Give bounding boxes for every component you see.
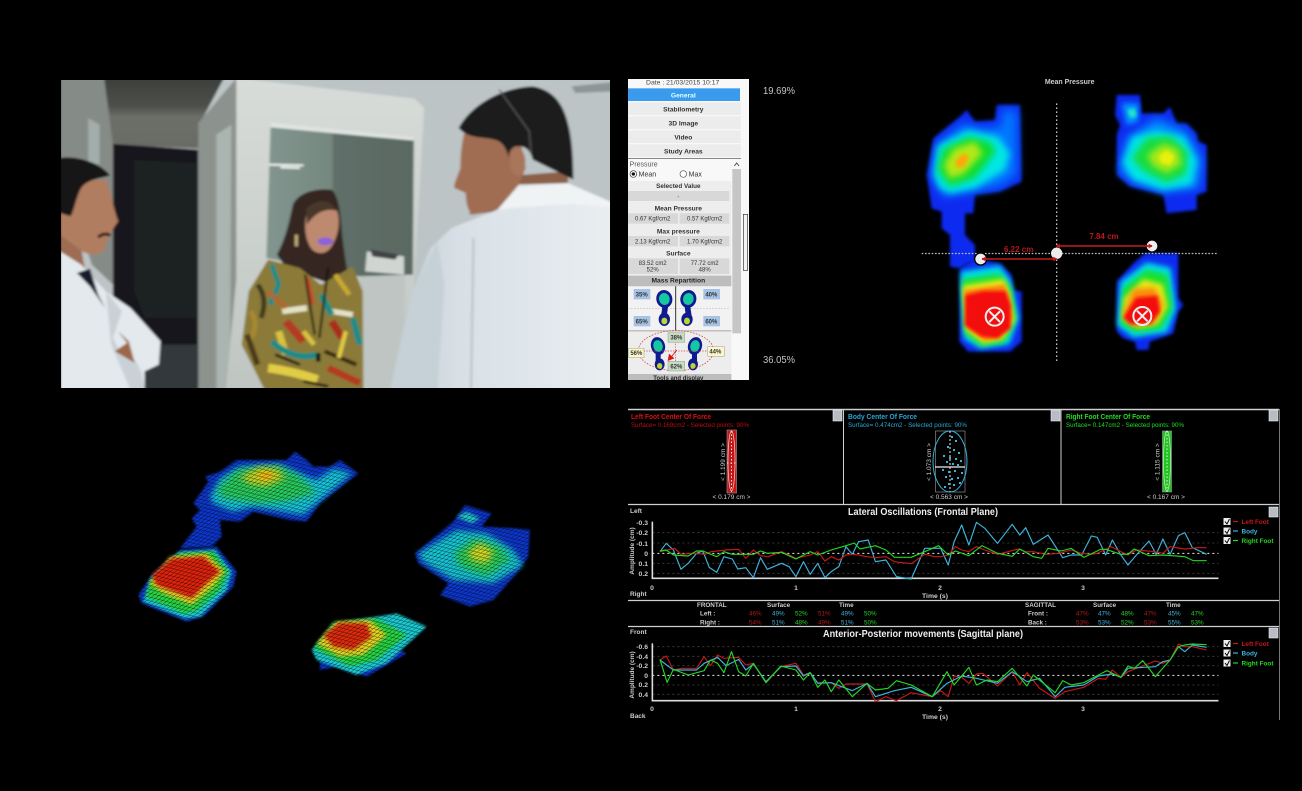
frontal and sagittal statistics table: 49% xyxy=(772,610,785,618)
left foot heel heat blob xyxy=(959,258,1022,352)
mean pressure values: 0.67 Kgf/cm2 xyxy=(635,217,671,223)
x axis labels: 2 xyxy=(938,706,942,713)
frontal and sagittal statistics table: Surface xyxy=(767,602,791,609)
3D right forefoot xyxy=(415,505,530,607)
chart legend: Body xyxy=(1242,650,1258,658)
body center of force: Surface= 0.474cm2 - Selected points: 90% xyxy=(848,422,967,429)
axis direction labels: Right xyxy=(630,591,647,598)
frontal and sagittal statistics table: 49% xyxy=(818,620,831,626)
lateral oscillations chart xyxy=(629,506,1278,600)
mass percentages upper: 65% xyxy=(636,319,648,325)
x axis labels: 1 xyxy=(794,585,798,592)
x axis labels: 0 xyxy=(650,706,654,713)
max pressure values: 1.70 Kgf/cm2 xyxy=(687,239,723,245)
man right xyxy=(469,171,568,215)
mass percentages upper: 40% xyxy=(705,292,718,298)
axis direction labels: Front xyxy=(630,629,647,636)
left foot forefoot heat blob xyxy=(927,105,1022,268)
software side panel xyxy=(628,79,749,382)
x axis labels: 1 xyxy=(794,706,798,713)
tools and display header: Tools and display xyxy=(653,376,704,382)
pressure radio selector xyxy=(630,162,702,178)
mass percentages upper: 35% xyxy=(636,292,648,298)
body center of force xyxy=(848,410,1060,501)
frontal and sagittal statistics table: 52% xyxy=(795,610,808,618)
center of pressure marker left heel xyxy=(986,308,1004,326)
right foot center of force: < 1.115 cm > xyxy=(1154,443,1162,481)
button: 3D Image: 3D Image xyxy=(669,120,698,127)
left distance marker and label xyxy=(975,245,1057,265)
left foot center of force: < 1.199 cm > xyxy=(720,443,727,481)
selected value: Selected Value xyxy=(656,183,701,190)
left foot center of force: Surface= 0.169cm2 - Selected points: 90% xyxy=(631,422,749,429)
lateral oscillations chart: Amplitude (cm) xyxy=(629,527,636,575)
chart title: Anterior-Posterior movements (Sagittal plane) xyxy=(823,628,1023,640)
forefoot percentage: 19.69% xyxy=(763,86,795,97)
frontal and sagittal statistics table: SAGITTAL xyxy=(1025,602,1056,609)
x axis labels: 0 xyxy=(650,585,654,592)
frontal and sagittal statistics table: 47% xyxy=(1076,610,1089,618)
chart legend: Right Foot xyxy=(1242,660,1274,668)
dotted axes xyxy=(922,103,1217,362)
axis direction labels: Back xyxy=(630,713,646,720)
surface values: 83.52 cm2 xyxy=(639,261,667,267)
frontal and sagittal statistics table: Right : xyxy=(700,620,720,626)
balance ellipse with percentages xyxy=(629,331,724,371)
y axis labels xyxy=(636,644,648,699)
surface values: 48% xyxy=(699,268,711,274)
y axis labels: -0.2 xyxy=(636,663,648,670)
button: Video xyxy=(628,130,741,143)
center of pressure marker right heel xyxy=(1133,307,1151,325)
left foot center of force xyxy=(631,410,842,501)
3D left heel xyxy=(138,547,237,622)
3D pressure map xyxy=(120,440,550,700)
y axis labels: -0.4 xyxy=(636,654,648,661)
max pressure values: 2.13 Kgf/cm2 xyxy=(635,239,671,245)
y axis labels: 0.2 xyxy=(639,571,648,578)
frontal and sagittal statistics table: Front : xyxy=(1028,610,1048,618)
frontal and sagittal statistics table: 51% xyxy=(818,610,831,618)
chart title: Lateral Oscillations (Frontal Plane) xyxy=(848,506,998,518)
x axis labels: Time (s) xyxy=(922,593,948,600)
chart legend: Right Foot xyxy=(1242,538,1274,545)
frontal and sagittal statistics table: 51% xyxy=(772,620,785,626)
chart legend: Body xyxy=(1242,528,1258,536)
frontal and sagittal statistics table xyxy=(697,602,1204,626)
surface values xyxy=(628,251,729,274)
y axis labels: -0.6 xyxy=(636,644,648,651)
body line xyxy=(660,645,1207,697)
left foot line xyxy=(660,644,1207,702)
left distance marker and label: 6.22 cm xyxy=(1004,245,1033,254)
x axis labels xyxy=(650,585,1085,600)
y axis labels: 0 xyxy=(644,673,648,680)
y axis labels: 0.1 xyxy=(639,561,648,568)
chart legend xyxy=(1224,518,1274,545)
frontal and sagittal statistics table: 55% xyxy=(1168,620,1181,626)
scrollbar xyxy=(732,163,748,333)
stabilometry panel frame xyxy=(628,409,1280,720)
right foot center of force: < 0.167 cm > xyxy=(1147,494,1185,501)
right foot center of force: Surface= 0.147cm2 - Selected points: 90% xyxy=(1066,422,1184,429)
frontal and sagittal statistics table: 45% xyxy=(1168,610,1181,618)
right foot line xyxy=(660,644,1207,697)
line plot xyxy=(652,643,1218,702)
frontal and sagittal statistics table: Surface xyxy=(1093,602,1117,609)
body center of force: < 1.073 cm > xyxy=(926,443,933,481)
frontal and sagittal statistics table: 50% xyxy=(864,610,877,618)
left foot center of force: < 0.179 cm > xyxy=(713,494,751,501)
3D right heel xyxy=(312,613,427,677)
tools and display header xyxy=(628,374,731,382)
frontal and sagittal statistics table: 54% xyxy=(749,620,762,626)
mini foot icons xyxy=(649,288,704,370)
balance ellipse with percentages: 62% xyxy=(670,364,683,370)
button: General: General xyxy=(671,92,696,99)
x axis labels: Time (s) xyxy=(922,714,948,721)
rearfoot percentage: 36.05% xyxy=(763,355,795,366)
axis direction labels xyxy=(630,629,647,720)
frontal and sagittal statistics table: 52% xyxy=(1121,620,1134,626)
surface values: Surface xyxy=(666,251,691,258)
balance ellipse with percentages: 44% xyxy=(709,349,722,355)
max pressure values xyxy=(628,228,729,246)
button: Study Areas: Study Areas xyxy=(664,148,703,155)
frontal and sagittal statistics table: 47% xyxy=(1144,610,1157,618)
button: Stabilometry: Stabilometry xyxy=(663,106,704,113)
selected value: - xyxy=(677,194,679,200)
mass repartition: Mass Repartition xyxy=(652,278,705,285)
y axis labels: -0.2 xyxy=(636,530,648,537)
y axis labels: 0.4 xyxy=(639,692,648,699)
3D left forefoot xyxy=(180,452,358,548)
pressure radio selector: Pressure xyxy=(630,162,658,169)
y axis labels: 0.2 xyxy=(639,682,648,689)
axis direction labels xyxy=(630,508,647,598)
y axis labels xyxy=(636,520,648,578)
y axis labels: -0.3 xyxy=(636,520,648,527)
frontal and sagittal statistics table: 48% xyxy=(795,620,808,626)
right foot center of force: Right Foot Center Of Force xyxy=(1066,412,1150,421)
frontal and sagittal statistics table: Time xyxy=(839,602,854,609)
right foot center of force xyxy=(1066,410,1278,501)
balance ellipse with percentages: 56% xyxy=(630,351,643,357)
mass repartition xyxy=(628,276,731,371)
woman xyxy=(277,189,351,291)
mean pressure values: 0.57 Kgf/cm2 xyxy=(687,217,723,223)
x axis labels: 3 xyxy=(1081,585,1085,592)
button: 3D Image xyxy=(628,116,741,129)
right foot heel heat blob xyxy=(1117,253,1183,350)
frontal and sagittal statistics table: 51% xyxy=(841,620,854,626)
x axis labels xyxy=(650,706,1085,721)
infographic canvas xyxy=(61,79,1280,720)
photo: three clinicians talking in corridor xyxy=(60,78,614,390)
y axis labels: -0.1 xyxy=(636,541,648,548)
frontal and sagittal statistics table: FRONTAL xyxy=(697,602,727,609)
frontal and sagittal statistics table: Left : xyxy=(700,610,715,618)
surface values: 52% xyxy=(647,268,659,274)
frontal and sagittal statistics table: 47% xyxy=(1191,610,1204,618)
button: Study Areas xyxy=(628,144,741,157)
frontal and sagittal statistics table: 48% xyxy=(1121,610,1134,618)
date line: Date : 21/03/2015 10:17 xyxy=(646,80,720,87)
pressure radio selector: Max xyxy=(689,171,702,178)
x axis labels: 3 xyxy=(1081,706,1085,713)
pressure radio selector: Mean xyxy=(639,171,656,178)
frontal and sagittal statistics table: 53% xyxy=(1144,620,1157,626)
frontal and sagittal statistics table: 49% xyxy=(841,610,854,618)
mass percentages upper xyxy=(634,289,720,326)
button: General xyxy=(628,88,740,101)
center point xyxy=(1051,248,1062,259)
right foot forefoot heat blob xyxy=(1115,95,1207,213)
x axis labels: 2 xyxy=(938,585,942,592)
right distance marker and label: 7.84 cm xyxy=(1089,232,1119,241)
frontal and sagittal statistics table: 50% xyxy=(864,620,877,626)
max pressure values: Max pressure xyxy=(657,228,700,235)
anterior-posterior movements chart: Amplitude (cm) xyxy=(629,651,636,699)
axis direction labels: Left xyxy=(630,508,643,515)
chart legend xyxy=(1224,640,1274,668)
3D mesh grid xyxy=(120,440,550,700)
anterior-posterior movements chart xyxy=(629,628,1278,721)
surface values: 77.72 cm2 xyxy=(691,261,719,267)
balance ellipse with percentages: 38% xyxy=(670,336,683,342)
mean pressure heat map xyxy=(922,79,1217,362)
frontal and sagittal statistics table: 53% xyxy=(1191,620,1204,626)
frontal and sagittal statistics table: 53% xyxy=(1098,620,1111,626)
selected value xyxy=(628,183,729,201)
body center of force: < 0.563 cm > xyxy=(930,494,968,501)
frontal and sagittal statistics table: 47% xyxy=(1098,610,1111,618)
frontal and sagittal statistics table: 53% xyxy=(1076,620,1089,626)
frontal and sagittal statistics table: Time xyxy=(1166,602,1181,609)
body center of force: Body Center Of Force xyxy=(848,412,917,421)
mean pressure values: Mean Pressure xyxy=(655,206,702,213)
left foot center of force: Left Foot Center Of Force xyxy=(631,412,711,421)
line plot xyxy=(652,522,1218,579)
mean pressure values xyxy=(628,206,729,224)
man left xyxy=(60,235,85,268)
mass percentages upper: 60% xyxy=(705,319,718,325)
button: Stabilometry xyxy=(628,102,741,115)
chart legend: Left Foot xyxy=(1242,641,1270,648)
right distance marker and label xyxy=(1056,232,1157,251)
chart legend: Left Foot xyxy=(1242,519,1270,526)
right foot line xyxy=(660,543,1207,561)
body line xyxy=(660,522,1207,579)
frontal and sagittal statistics table: Back : xyxy=(1028,620,1047,626)
frontal and sagittal statistics table: 46% xyxy=(749,610,762,618)
left foot line xyxy=(660,547,1207,564)
y axis labels: 0 xyxy=(644,551,648,558)
button: Video: Video xyxy=(674,134,692,141)
heading: Mean Pressure: Mean Pressure xyxy=(1045,79,1095,86)
